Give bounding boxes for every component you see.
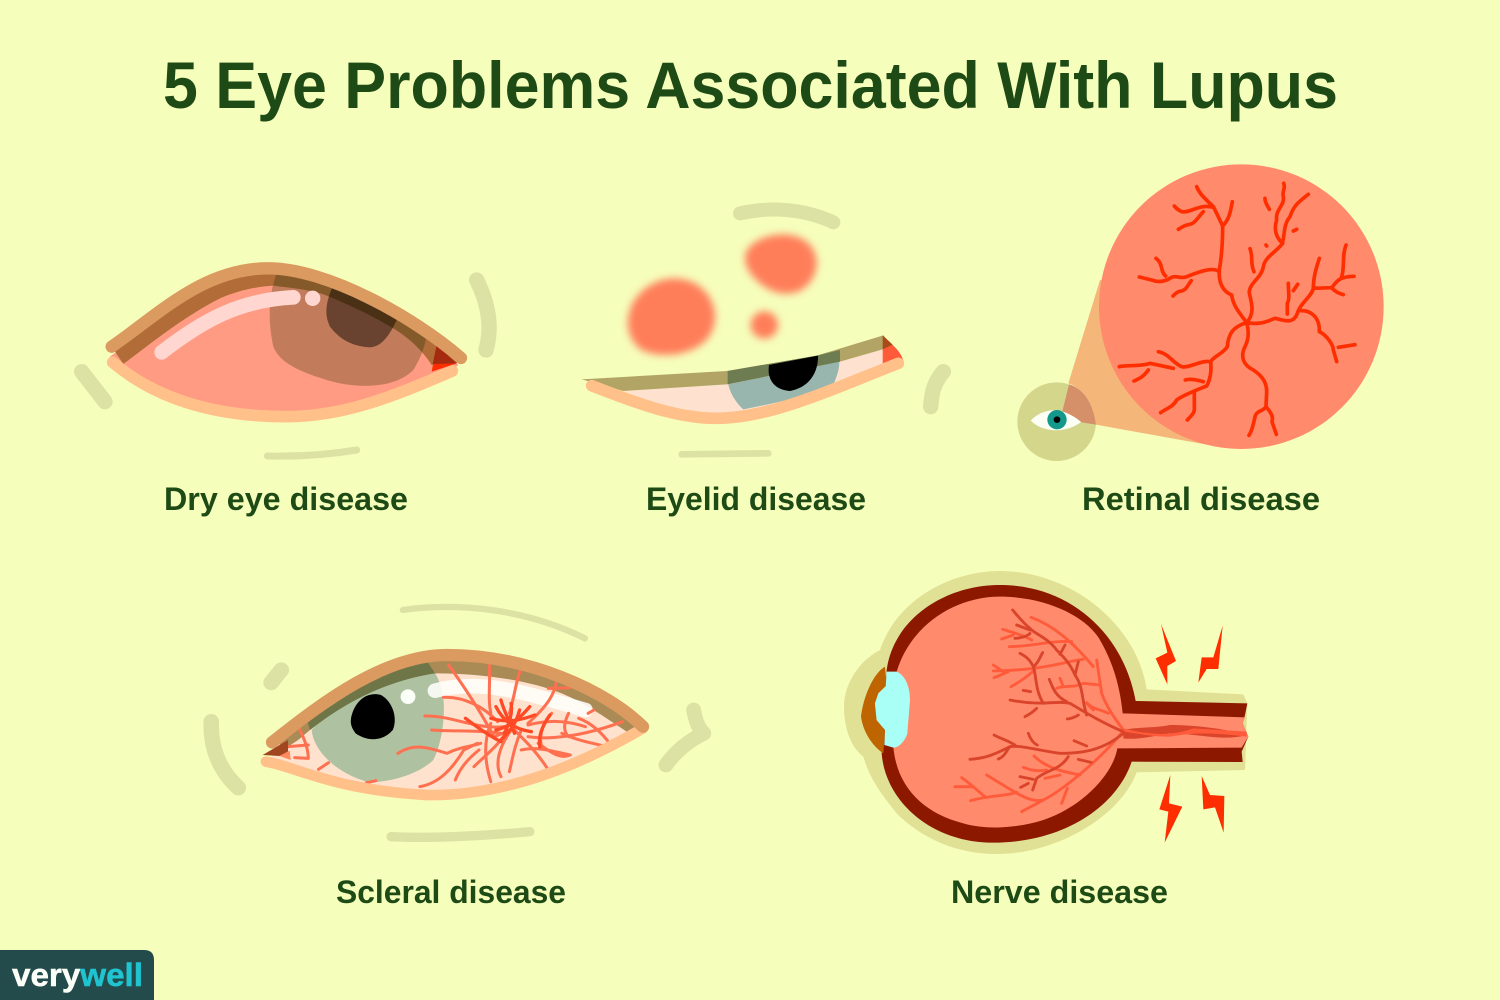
illustration: dry eye [82,268,489,456]
cornea [875,672,910,748]
sclera [272,655,643,795]
motion marks [682,210,943,454]
pupil [351,694,395,739]
tear duct [263,740,291,760]
vitreous interior [893,597,1248,827]
rash blotches [632,238,813,351]
pupil [769,356,818,391]
upper lid [112,268,461,358]
iris [312,662,444,782]
iris [270,273,426,386]
small eye [1031,410,1082,430]
eyelid shadow [112,268,461,365]
sclera [623,349,883,413]
iris under lid shadow [272,274,426,352]
outer corner [883,335,903,363]
blood vessels [288,665,623,787]
tear duct [432,345,457,372]
label: eyelid disease: Eyelid disease [646,481,866,517]
illustration: nerve disease [844,571,1248,854]
nerve core [1123,725,1247,739]
cone over eye [1062,384,1096,425]
title: 5 Eye Problems Associated With Lupus [163,48,1338,122]
lower lid [266,728,643,795]
label: dry eye disease: Dry eye disease [164,481,408,517]
logo: verywell: verywell [12,957,143,993]
iris under lid shadow [307,655,435,730]
motion marks [82,280,489,456]
magnifying cone [1068,280,1267,445]
label: nerve disease: Nerve disease [951,874,1168,910]
outer halo [844,571,1247,854]
reflections [401,686,585,710]
sclera [110,275,458,417]
upper lid [272,655,643,742]
magnifier circle [1017,382,1096,461]
label: retinal disease: Retinal disease [1082,481,1320,517]
label: scleral disease: Scleral disease [336,874,566,910]
pain bolts [1156,624,1224,843]
dark vessels [970,610,1123,790]
eyelid [582,335,892,391]
iris [861,667,887,753]
highlight [162,291,320,352]
lid shadow [272,655,643,747]
illustration: retinal disease [1017,164,1384,461]
light vessels [955,617,1123,812]
eyeball wall and optic nerve sheath [882,585,1248,843]
illustration: scleral disease [211,607,704,837]
motion marks [211,607,704,837]
lower lid [113,362,452,417]
blood vessels [1119,183,1355,435]
pupil [326,283,397,347]
logo: verywell [0,950,154,1000]
iris [728,362,839,409]
lower lid [592,363,898,418]
illustration: eyelid disease [582,210,943,454]
iris under eyelid [728,350,840,384]
retina circle [1099,164,1384,449]
inflamed centre [465,700,550,747]
